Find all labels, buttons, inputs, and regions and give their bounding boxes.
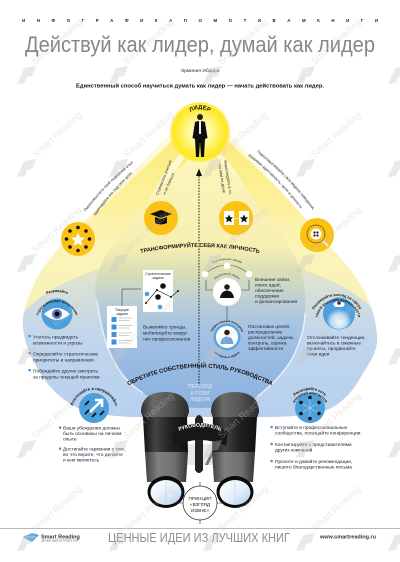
icon: magnifier circle [300, 218, 334, 252]
footer url: www.smartreading.ru [319, 534, 376, 540]
icon: star circle [61, 222, 95, 256]
beam labels: развивая адаптивность, цели и ценности [248, 154, 302, 208]
outer teardrop [22, 136, 377, 417]
text: trends mobilize: мобилизуйте вокруг [143, 330, 188, 336]
list: strategic actions: возможности и угрозы [33, 342, 83, 346]
watermark pattern: Smart Reading [309, 110, 364, 160]
icon: network [295, 393, 325, 423]
network nodes [202, 263, 252, 277]
watermark pattern: Smart Reading [122, 205, 177, 255]
list: beliefs: Достигайте гармонии с тем, [63, 446, 125, 452]
label: look beyond: Расширяйте взгляд на сферу [312, 294, 362, 310]
icon: two star cards [219, 201, 253, 235]
manager arc labels: Эффективный менеджер [210, 320, 244, 332]
list: strategic actions [28, 334, 100, 380]
watermark pattern: Smart Reading [216, 298, 271, 348]
network label: Сеть внешних связей [212, 258, 242, 264]
list: beliefs: опыте [63, 438, 77, 442]
watermark pattern: Smart Reading [309, 17, 364, 67]
icon: eye [42, 298, 72, 330]
list: contacts: пишите благодарственные письма [275, 464, 352, 470]
left barrel [141, 392, 189, 508]
beam labels: Переосмысливайте свои модели поведения, [256, 150, 314, 210]
watermark pattern: Smart Reading [30, 110, 85, 160]
icon: arrows [79, 393, 109, 423]
watermark pattern: Smart Reading [122, 298, 177, 348]
leader arc label: Внутренний лидер [214, 272, 240, 280]
beam labels: что вам по душе [218, 164, 225, 193]
binoculars [141, 392, 259, 508]
icon: crystal ball [323, 298, 355, 330]
label: strategic thinking [36, 290, 78, 316]
label: contacts arc: внешних контактов [292, 392, 327, 403]
label: look beyond: своей внешней деятельности [316, 298, 360, 318]
watermark pattern: Smart Reading [216, 391, 271, 441]
watermark pattern: Smart Reading [309, 205, 364, 255]
supertitle: И Н Ф О Г Р А Ф И К А П О М О Т И В А М К Н И Г И [22, 18, 378, 23]
panel: contacts [270, 387, 361, 470]
list: strategic actions: Побуждайте других смотреть [33, 368, 99, 374]
watermark pattern: Smart Reading [122, 110, 177, 160]
list: beliefs: быть основаны на личном [63, 431, 121, 437]
manager arc labels: Контроль и задачи [214, 351, 240, 358]
watermark pattern: Smart Reading [309, 484, 364, 534]
beam labels: Инвестируйте в то, [224, 160, 232, 194]
watermark pattern: Smart Reading [309, 298, 364, 348]
transition label: К РОЛИ [191, 391, 210, 397]
watermark pattern: Smart Reading [216, 110, 271, 160]
text: trends: проекты, продвигайте [307, 345, 356, 352]
footer logo [23, 533, 80, 542]
network arcs [205, 265, 249, 320]
watermark pattern: Smart Reading [122, 391, 177, 441]
central dashed arrow [196, 168, 202, 388]
text: external links: поддержки [255, 294, 279, 300]
watermark pattern: Smart Reading [216, 17, 271, 67]
watermark pattern: Smart Reading [30, 391, 85, 441]
panel: tasks and trends [107, 270, 191, 348]
beam labels: Стремитесь учиться [156, 160, 172, 195]
text: trends [307, 334, 366, 358]
title: Действуй как лидер, думай как лидер [25, 32, 375, 57]
text: external links: обеспечение [255, 288, 284, 294]
panel: beliefs [59, 388, 125, 464]
label: contacts arc: Расширяйте сеть [293, 387, 326, 396]
list: contacts: других компаний [275, 446, 313, 454]
hinge rod [195, 415, 203, 473]
beam labels: Переосмыслите свой лидерский опыт [84, 161, 133, 212]
watermark pattern: Smart Reading [216, 205, 271, 255]
doc: current tasks [107, 306, 137, 348]
blue lower band [22, 270, 377, 417]
list: contacts: Просите и давайте рекомендации, [275, 458, 352, 465]
watermark pattern: Smart Reading [30, 205, 85, 255]
watermark pattern: Smart Reading [122, 484, 177, 534]
leader sun icon [170, 102, 230, 162]
footer logo: ЦЕННЫЕ ИДЕИ ИЗ ЛУЧШИХ КНИГ [41, 540, 80, 542]
text: external links: и финансирования [255, 299, 298, 305]
doc: current tasks: задачи [116, 312, 128, 316]
connector [122, 289, 141, 306]
text: external links: поиск идей, [255, 282, 281, 288]
list: beliefs: и кем являетесь [63, 458, 100, 464]
gap behind bridge [186, 444, 214, 465]
panel: network and team [202, 258, 298, 358]
bridge band [172, 423, 228, 446]
watermark pattern: Smart Reading [30, 17, 85, 67]
watermark pattern: Smart Reading [216, 484, 271, 534]
list: contacts: Контактируйте с представителями [275, 441, 352, 448]
icon: manager portrait [214, 324, 240, 350]
panel: trends crystal ball [307, 294, 366, 358]
list: contacts [270, 424, 361, 470]
author: Эрминия Ибарра [181, 68, 220, 74]
text: external links: Внешние связи, [255, 277, 290, 283]
main teardrop diagram [22, 136, 377, 417]
text: trends mobilize: них профессионалов [143, 336, 191, 342]
text: goals [248, 323, 294, 352]
watermark pattern: Smart Reading [122, 17, 177, 67]
text: goals: контроль, оценка [248, 342, 287, 346]
label: strategic thinking: стратегическое мышление [36, 300, 78, 316]
footer rule [0, 527, 400, 530]
icon: leader portrait [213, 278, 241, 306]
heading: own style: ОБРЕТИТЕ СОБСТВЕННЫЙ СТИЛЬ РУКОВОДСТВА [127, 362, 272, 386]
beam labels [84, 150, 314, 216]
transition label: ЛИДЕРА [190, 397, 211, 403]
transition label [188, 384, 213, 403]
principle crosshair [174, 482, 226, 524]
beam labels: и не бояться [164, 173, 174, 195]
leader figure [192, 114, 208, 157]
text: trends: включайтесь в смежные [307, 340, 361, 346]
list: strategic actions: Учитесь предвидеть [33, 334, 79, 340]
leader label on band: РУКОВОДИТЕЛЬ [178, 422, 222, 431]
list: beliefs: Ваши убеждения должны [63, 426, 120, 432]
doc: current tasks: Текущие [115, 308, 129, 312]
text: goals: эффективности [248, 346, 283, 352]
doc: strategic tasks: задачи [152, 276, 164, 280]
inner teardrop [95, 150, 305, 408]
text: external links [255, 277, 298, 305]
text: trends: свои идеи [307, 352, 330, 358]
label: beliefs arc: Вовлекайте и направляйте [70, 388, 117, 406]
yellow beams [86, 140, 308, 244]
list: contacts: сообщества, посещайте конференции [275, 430, 361, 436]
leader label: ЛИДЕР [190, 105, 211, 112]
icon: graduation cap [144, 201, 178, 235]
footer slogan: ЦЕННЫЕ ИДЕИ ИЗ ЛУЧШИХ КНИГ [108, 531, 290, 545]
text: trends: Отслеживайте тенденции, [307, 334, 366, 341]
principle crosshair: ПРИНЦИП [188, 496, 212, 501]
text: trends mobilize [143, 324, 191, 342]
doc: strategic tasks [143, 270, 179, 312]
beam labels: адаптируйте его под свои цели [94, 172, 132, 216]
text: goals: Постановка целей, [248, 323, 290, 330]
list: beliefs: во что верите, что делаете [63, 453, 123, 458]
watermark pattern: Smart Reading [309, 391, 364, 441]
panel: eye strategic thinking [28, 290, 100, 380]
manager arc labels [210, 320, 244, 358]
watermark pattern: Smart Reading [30, 298, 85, 348]
principle crosshair: ИЗВНЕ» [191, 508, 209, 513]
list: strategic actions: Определяйте стратегические [33, 350, 98, 358]
principle crosshair: «ВЗГЛЯД [190, 502, 211, 507]
footer logo: Smart Reading [41, 534, 80, 540]
heading: transform: ТРАНСФОРМИРУЙТЕ СЕБЯ КАК ЛИЧНОСТЬ [140, 242, 260, 253]
list: strategic actions: за пределы текущей практики [33, 374, 100, 380]
watermark pattern: Smart Reading [30, 484, 85, 534]
label: strategic thinking: Развивайте [46, 290, 68, 294]
text: trends mobilize: Выявляйте тренды, [143, 324, 187, 330]
text: goals: должностей, задачи, [248, 334, 294, 341]
right barrel [211, 392, 259, 508]
subtitle: Единственный способ научиться думать как лидер — начать действовать как лидер. [76, 82, 324, 90]
list: beliefs [59, 426, 125, 464]
transition label: ПЕРЕХОД [188, 384, 213, 390]
list: strategic actions: приоритеты и направления [33, 358, 94, 364]
text: goals: распределение [248, 330, 283, 336]
doc: strategic tasks: Стратегические [145, 272, 171, 276]
list: contacts: Вступайте в профессиональные [275, 424, 348, 431]
